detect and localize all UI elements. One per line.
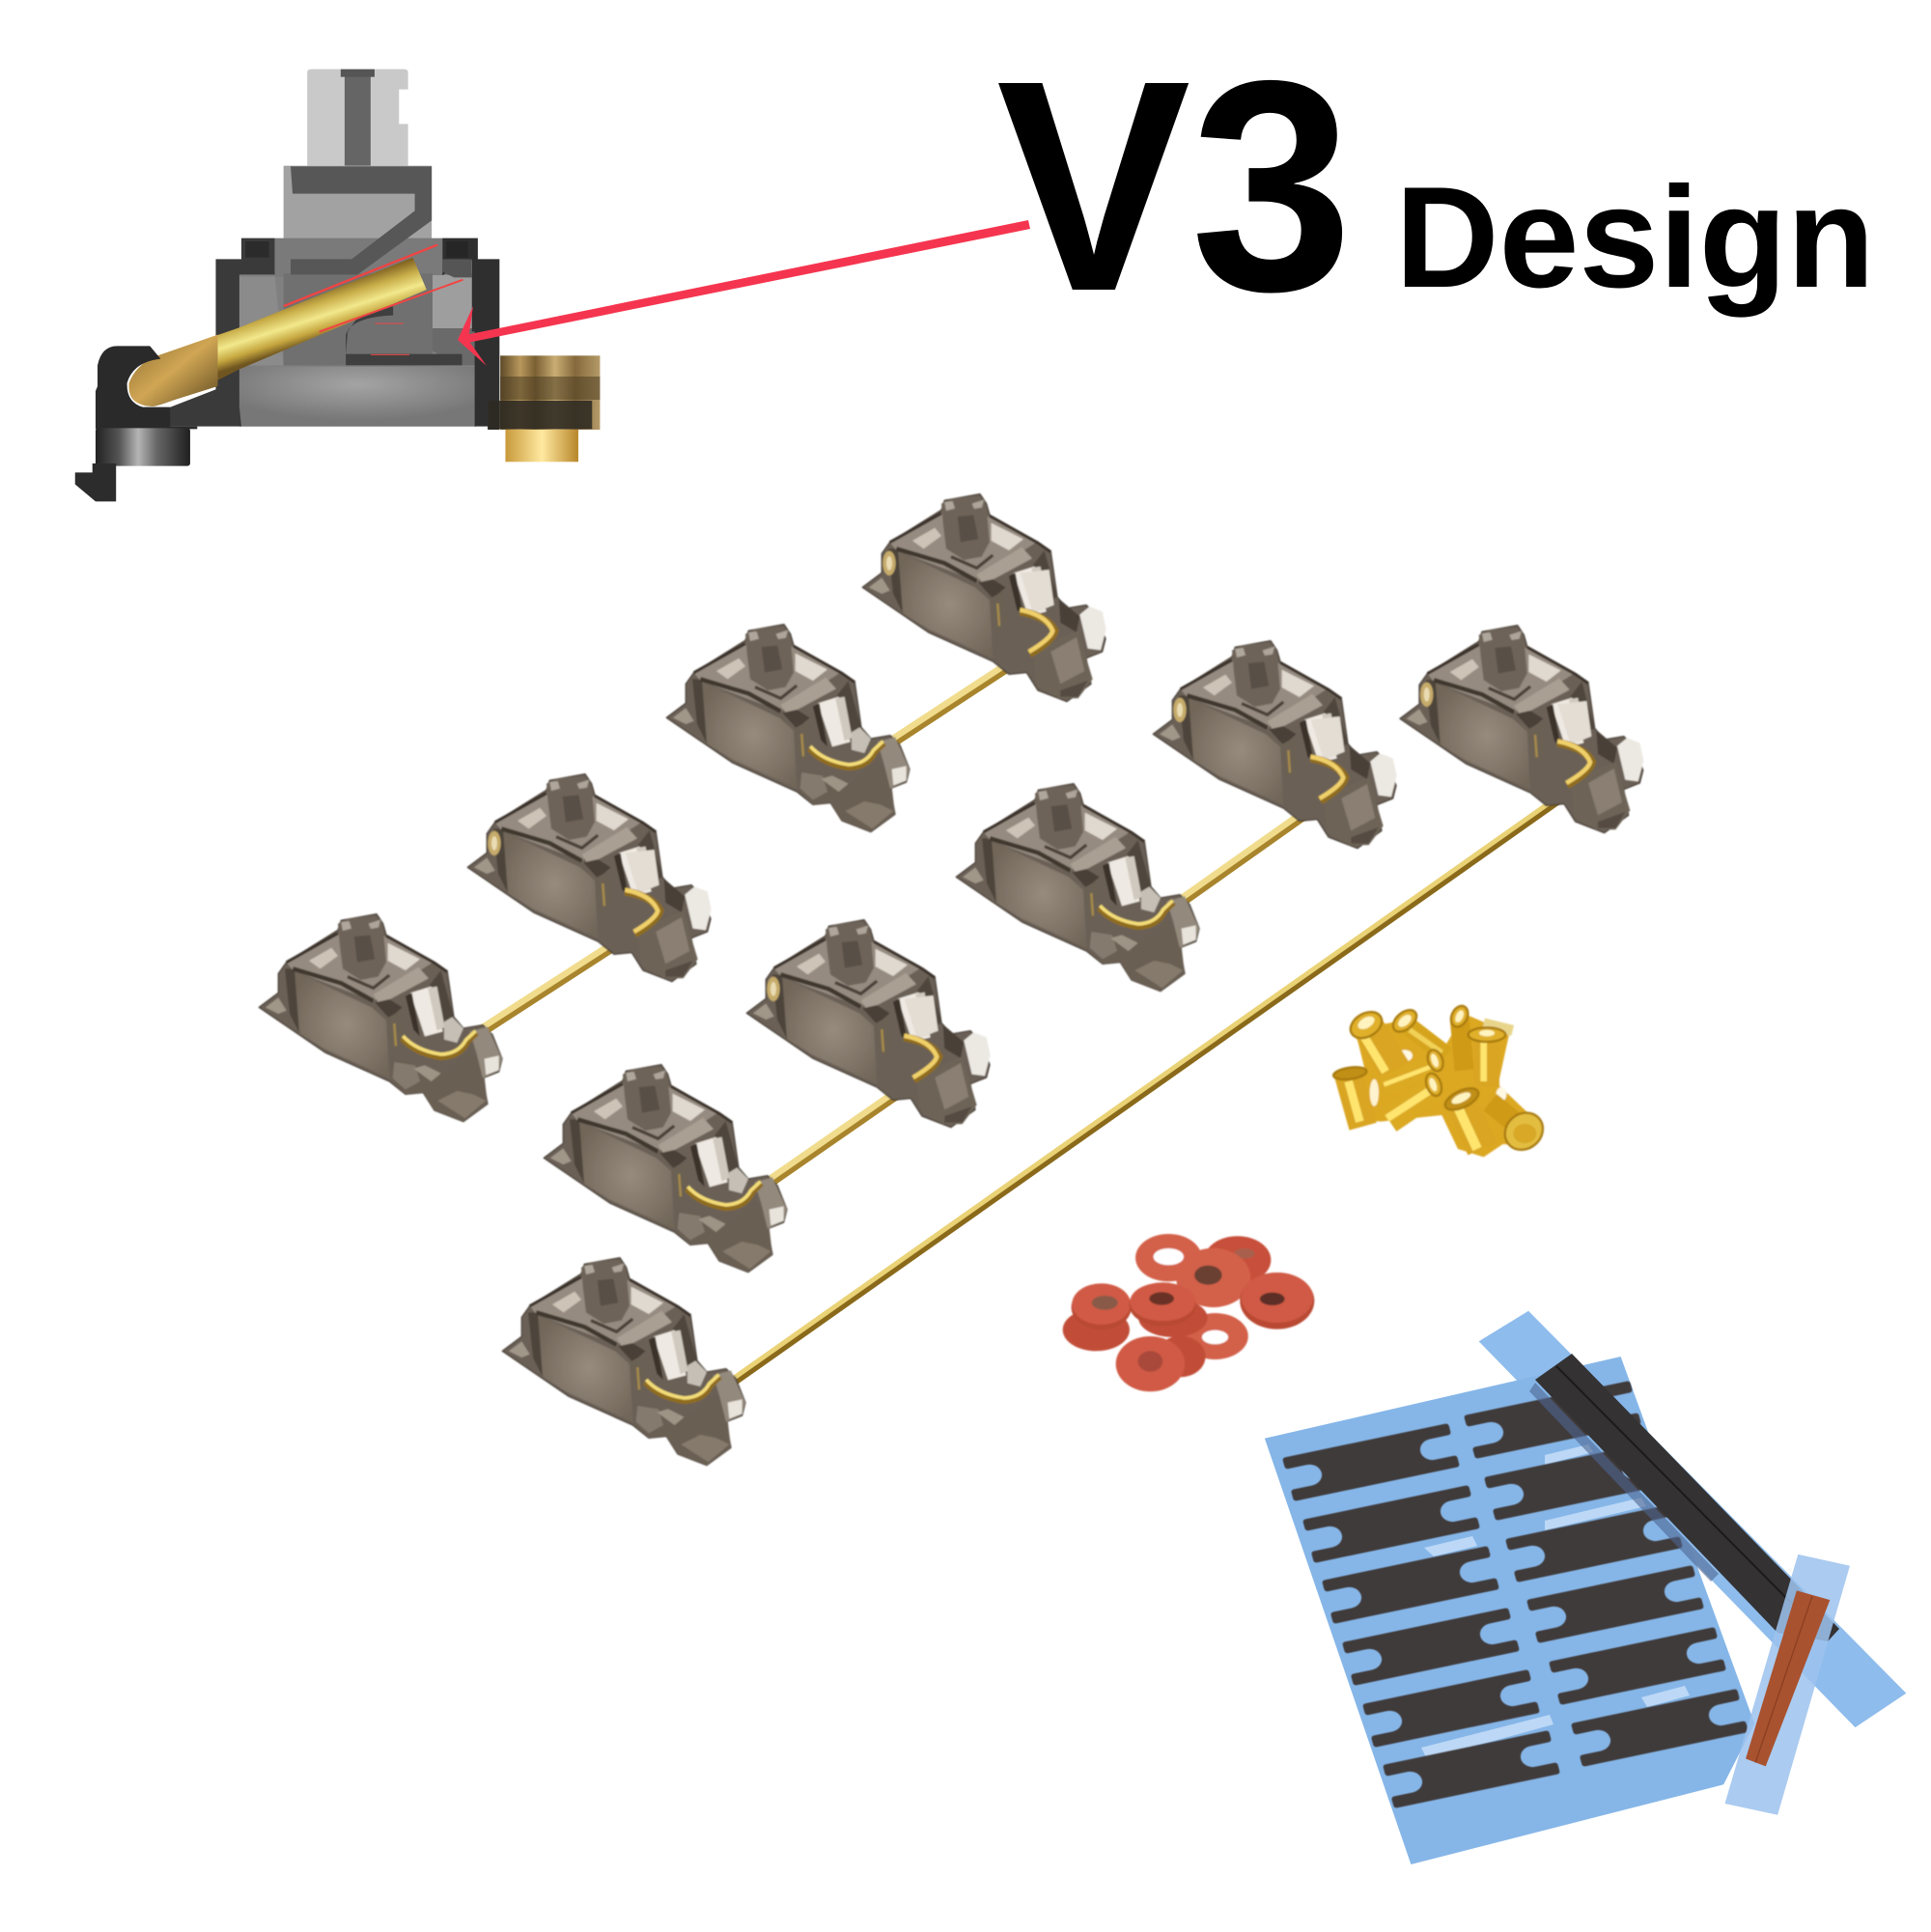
hook latch xyxy=(346,306,462,365)
title small: Design: Design xyxy=(1395,156,1875,318)
stabilizer: upper rear pair, right housing xyxy=(862,494,1106,702)
blue backing strip xyxy=(1479,1311,1906,1727)
translucent blue strip xyxy=(1724,1554,1850,1815)
long wire xyxy=(723,785,1576,1388)
stabilizer: upper rear pair, left housing xyxy=(666,625,910,832)
dark foam pads, right column xyxy=(1464,1381,1749,1767)
slider xyxy=(284,166,432,277)
red contact glow xyxy=(285,245,462,354)
washer front row xyxy=(1072,1273,1314,1391)
dark foam pads, left column xyxy=(1282,1423,1560,1808)
strip shadow xyxy=(1529,1383,1719,1582)
foam pad sheets xyxy=(1265,1311,1906,1864)
stabilizer: mid pair, right housing xyxy=(1153,641,1397,849)
stabilizer: centre pair, left housing xyxy=(544,1065,787,1273)
stabilizer: long bar, right housing xyxy=(1400,626,1643,833)
slider Z channel xyxy=(291,166,432,274)
black foam strip xyxy=(1535,1354,1839,1641)
short wires xyxy=(475,646,1329,1189)
stabilizer: mid pair, left housing xyxy=(956,784,1199,992)
arrow: red pointer xyxy=(458,220,1030,366)
washer back row xyxy=(1063,1234,1271,1377)
stabilizer: long bar, left housing xyxy=(502,1258,745,1466)
left clip xyxy=(75,346,197,501)
gold screws xyxy=(1332,1003,1551,1158)
stabilizer: centre pair, right housing xyxy=(746,920,991,1128)
brown foam strip xyxy=(1746,1590,1830,1766)
housing walls xyxy=(171,238,499,430)
diagram: stabilizer cross-section xyxy=(75,70,600,501)
sheet highlights xyxy=(1421,1444,1690,1759)
stabilizer: left pair, right housing xyxy=(467,774,712,982)
stabilizer: left pair, left housing xyxy=(259,914,502,1122)
stem xyxy=(307,70,408,166)
title: V3 Design xyxy=(996,18,1875,353)
gold wire xyxy=(126,258,427,408)
red washers xyxy=(1063,1234,1314,1391)
title large: V3: V3 xyxy=(996,18,1353,353)
right screw post xyxy=(489,355,600,462)
blue backing sheet xyxy=(1265,1357,1754,1864)
housing inner chamber xyxy=(239,238,476,427)
